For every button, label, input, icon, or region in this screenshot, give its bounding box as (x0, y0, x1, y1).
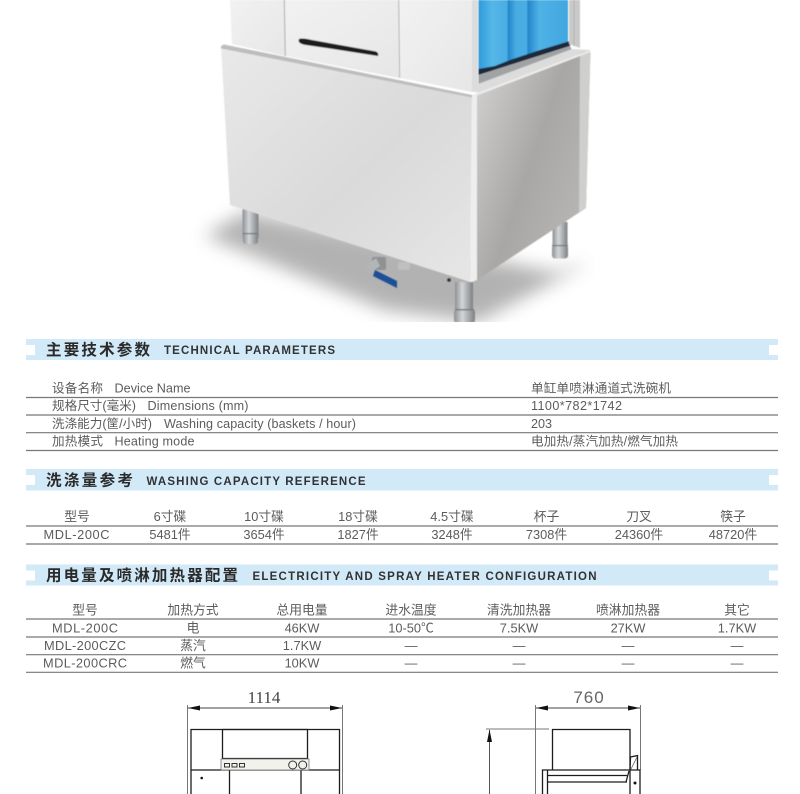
heater table: 总用电量 (276, 602, 328, 618)
capacity table: 7308件 (526, 527, 567, 542)
upper cabinet right panel (400, 0, 472, 92)
heading text: WASHING CAPACITY REFERENCE (146, 476, 366, 488)
side folded edge (579, 50, 590, 212)
heater table: — (513, 656, 526, 670)
section: washing capacity (26, 469, 778, 544)
heading text (46, 470, 366, 490)
corner post (472, 0, 478, 92)
height dimension (486, 729, 549, 794)
parameters table: Heating mode (114, 434, 194, 448)
heater table: 1.7KW (283, 638, 322, 653)
heater table: 1.7KW (718, 620, 757, 636)
heater table: 清洗加热器 (487, 602, 551, 618)
heater table: MDL-200CZC (44, 638, 126, 653)
heater table: 型号 (72, 602, 98, 618)
capacity table: 杯子 (534, 509, 560, 524)
heading text: TECHNICAL PARAMETERS (164, 345, 335, 357)
right post (569, 0, 580, 48)
front leg (454, 282, 475, 323)
dimension 760 (536, 688, 640, 794)
upper cabinet left panel (230, 0, 285, 56)
dimension 760: 760 (573, 688, 605, 707)
capacity table: 型号 (64, 509, 90, 524)
heater table: — (405, 656, 418, 670)
parameters table: Washing capacity (baskets / hour) (164, 417, 356, 431)
parameters table: 加热模式 (52, 434, 103, 448)
upper cabinet door (285, 0, 399, 78)
valve (366, 257, 410, 288)
heading text: 用电量及喷淋加热器配置 (46, 566, 238, 584)
heater table: 46KW (285, 620, 320, 636)
front view drawing (188, 688, 342, 794)
parameters table (26, 380, 778, 450)
capacity table: 18寸碟 (338, 509, 378, 524)
rear left leg (242, 208, 258, 244)
heater table: 进水温度 (385, 602, 437, 618)
section: technical parameters (26, 339, 778, 450)
capacity table: 10寸碟 (244, 509, 284, 524)
capacity table: 3248件 (431, 527, 473, 542)
heading text (46, 566, 596, 584)
heading text: 主要技术参数 (46, 340, 150, 359)
heater table: 蒸汽 (180, 638, 206, 653)
parameters table: Device Name (114, 382, 190, 396)
parameters table: 203 (531, 417, 552, 431)
lower cabinet corner (470, 93, 477, 283)
heater table: 燃气 (180, 656, 206, 670)
front outline (191, 730, 340, 794)
capacity table: 48720件 (709, 527, 757, 542)
capacity table: 4.5寸碟 (430, 509, 474, 524)
heater table: — (405, 638, 418, 653)
heading bar (26, 564, 778, 586)
floor shadow (205, 212, 590, 322)
heater table: — (731, 638, 744, 653)
lower cabinet side (477, 50, 590, 280)
blue curtain (478, 0, 568, 71)
heading bar (26, 469, 778, 490)
machine photo (205, 0, 590, 323)
heater table: 7.5KW (500, 620, 539, 636)
heater table: 10-50℃ (388, 620, 434, 636)
capacity table: MDL-200C (44, 527, 110, 542)
section: electricity and heater (26, 564, 778, 672)
lower cabinet front (221, 46, 472, 282)
parameters table: 规格尺寸(毫米) (52, 398, 136, 413)
capacity table (26, 509, 778, 544)
curtain bottom tray (478, 41, 570, 75)
heater table (26, 602, 778, 672)
parameters table: 洗涤能力(筐/小时) (52, 416, 152, 431)
heater table: MDL-200CRC (43, 656, 127, 670)
heater table: 喷淋加热器 (596, 602, 660, 618)
heater table: — (622, 638, 635, 653)
heater table: — (731, 656, 744, 670)
door handle (299, 38, 378, 56)
side outline (542, 730, 640, 794)
heading text: 洗涤量参考 (46, 470, 133, 490)
capacity table: 3654件 (243, 527, 285, 542)
capacity table: 24360件 (615, 527, 663, 542)
parameters table: 电加热/蒸汽加热/燃气加热 (531, 434, 678, 448)
heater table: 加热方式 (167, 602, 219, 618)
heading text (46, 340, 335, 359)
parameters table: 1100*782*1742 (531, 399, 622, 413)
heater table: — (622, 656, 635, 670)
heater table: 27KW (611, 620, 646, 636)
parameters table: 设备名称 (52, 380, 103, 396)
top edge strip (221, 44, 472, 98)
parameters table: 单缸单喷淋通道式洗碗机 (531, 380, 671, 396)
capacity table: 1827件 (337, 527, 379, 542)
rear right leg (552, 222, 568, 258)
heater table: — (513, 638, 526, 653)
capacity table: 刀叉 (626, 509, 652, 524)
side view drawing (486, 688, 640, 794)
heading text: ELECTRICITY AND SPRAY HEATER CONFIGURATION (252, 571, 596, 583)
heater table: 其它 (724, 602, 750, 618)
heater table: 电 (187, 620, 200, 636)
dimension 1114 (188, 688, 342, 794)
blue valve handle (373, 270, 397, 288)
capacity table: 5481件 (149, 527, 191, 542)
control panel (221, 759, 309, 770)
parameters table: Dimensions (mm) (148, 399, 248, 413)
heading bar (26, 339, 778, 360)
dimension 1114: 1114 (248, 688, 281, 707)
capacity table: 6寸碟 (154, 509, 187, 524)
capacity table: 筷子 (720, 509, 746, 524)
heater table: 10KW (285, 656, 320, 670)
heater table: MDL-200C (52, 620, 118, 636)
